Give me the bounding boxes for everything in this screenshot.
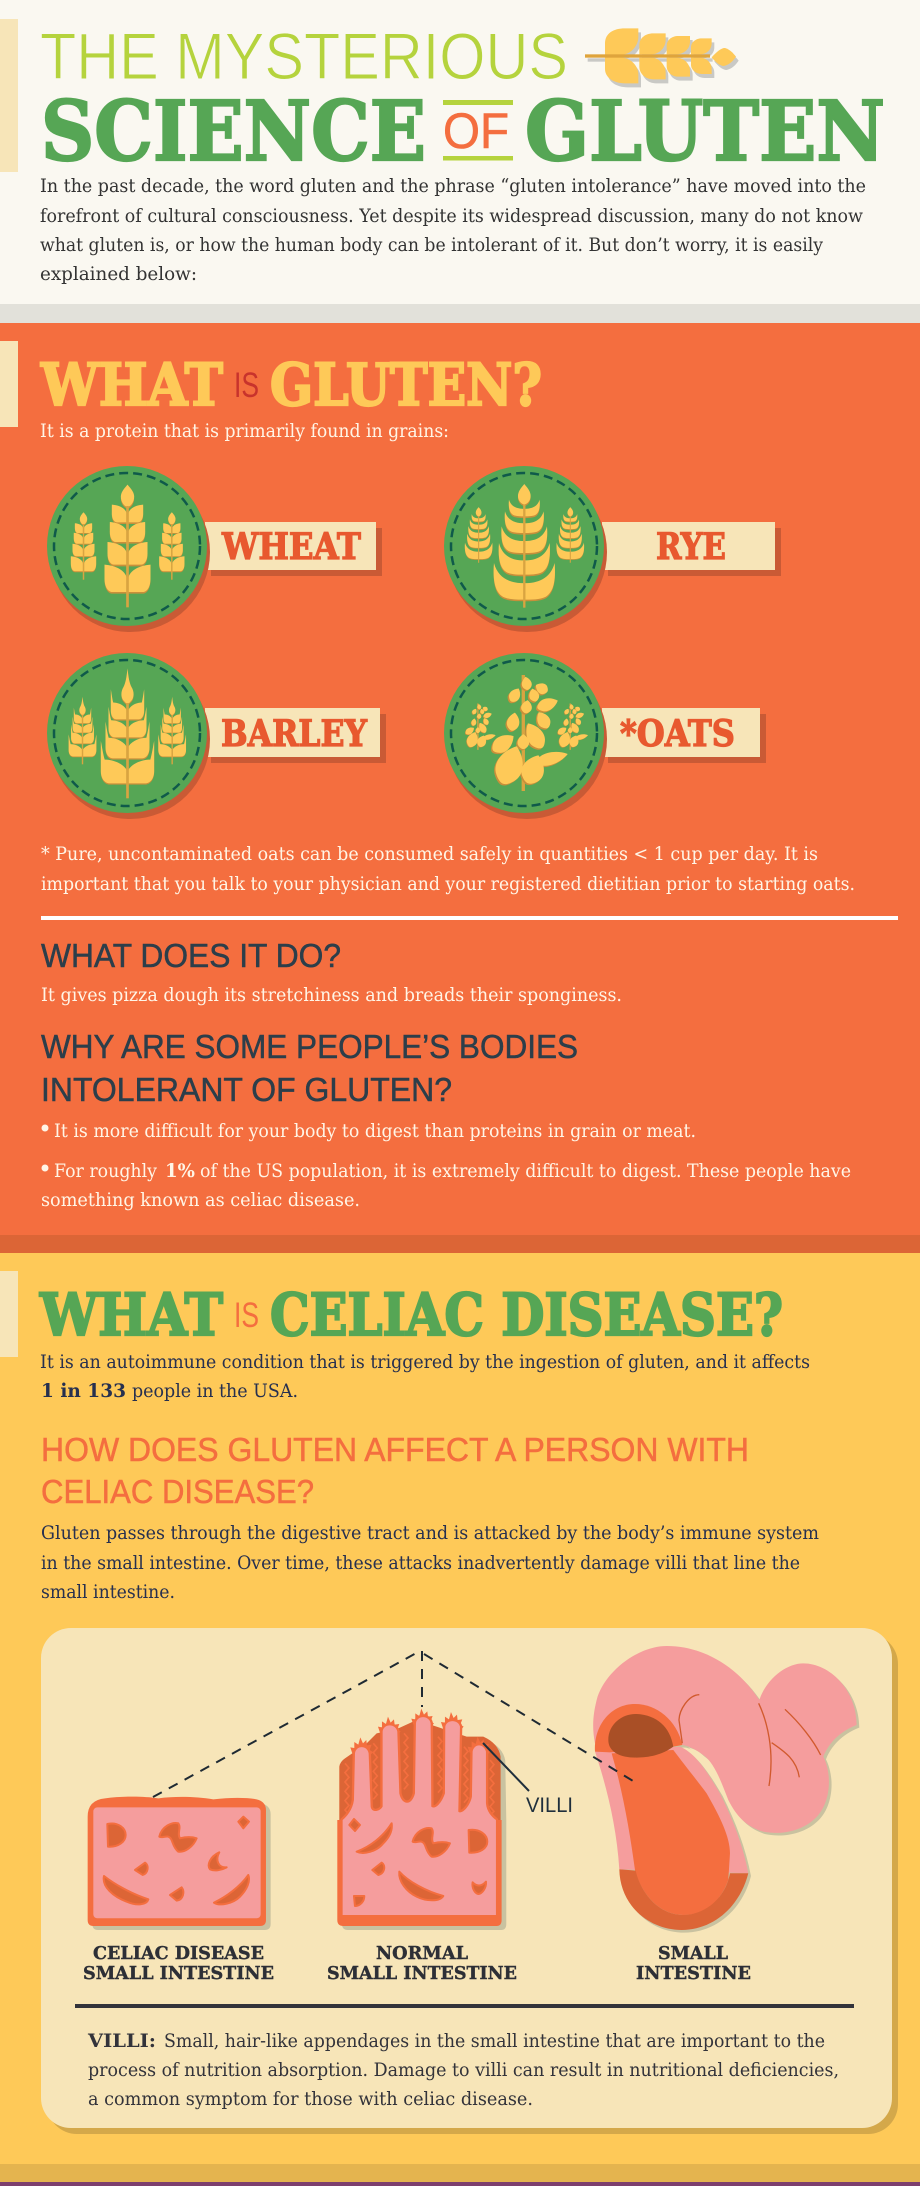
badge: wheat bbox=[47, 466, 382, 632]
gluten heading tab bbox=[0, 341, 18, 427]
caption: normal small intestine: NORMAL bbox=[376, 1943, 468, 1964]
badge: rye: RYE bbox=[656, 526, 726, 568]
gluten definition text: It is a protein that is primarily found in grains: bbox=[40, 420, 449, 442]
heading: why intolerant: WHY ARE SOME PEOPLE’S BODIES bbox=[41, 1028, 578, 1065]
band: gray divider bbox=[0, 304, 920, 323]
heading: how does gluten affect bbox=[41, 1431, 749, 1510]
heading: what is celiac disease: IS bbox=[234, 1296, 259, 1335]
celiac definition text: 1 in 133 bbox=[41, 1380, 126, 1402]
heading: why intolerant bbox=[41, 1028, 578, 1108]
heading: what does it do: WHAT DOES IT DO? bbox=[41, 937, 341, 974]
badge: barley: BARLEY bbox=[221, 713, 368, 755]
caption: celiac disease small intestine: SMALL INTESTINE bbox=[83, 1963, 274, 1984]
caption: celiac disease small intestine bbox=[83, 1943, 274, 1984]
section: what is celiac disease background bbox=[0, 1253, 920, 2164]
badge: rye bbox=[444, 466, 781, 632]
callout: villi: VILLI bbox=[526, 1794, 573, 1817]
bullet list: something known as celiac disease. bbox=[41, 1189, 360, 1211]
celiac definition text: people in the USA. bbox=[132, 1380, 298, 1402]
text: villi definition bbox=[87, 2030, 839, 2110]
illustration: normal small intestine bbox=[337, 1709, 506, 1930]
caption: normal small intestine bbox=[327, 1943, 517, 1984]
icon: wheat sprig bbox=[585, 28, 739, 87]
oats footnote: * Pure, uncontaminated oats can be consumed safely in quantities < 1 cup per day. It is bbox=[41, 843, 818, 865]
callout: villi bbox=[483, 1743, 573, 1817]
badge: barley bbox=[47, 653, 386, 819]
heading: what is gluten: WHAT bbox=[40, 351, 223, 419]
heading: what is gluten: GLUTEN? bbox=[270, 351, 542, 419]
illustration: small intestine bbox=[593, 1646, 859, 1933]
heading: why intolerant: INTOLERANT OF GLUTEN? bbox=[41, 1071, 452, 1108]
bullet list bbox=[41, 1120, 851, 1211]
oats footnote bbox=[41, 843, 855, 895]
caption: small intestine: SMALL bbox=[658, 1943, 728, 1964]
heading: what is gluten: IS bbox=[234, 366, 259, 405]
oats footnote: important that you talk to your physician and your registered dietitian prior to starting oats. bbox=[41, 873, 855, 895]
text: villi definition: VILLI: bbox=[87, 2030, 156, 2052]
badge: oats bbox=[444, 653, 766, 819]
text: what it does: It gives pizza dough its stretchiness and breads their sponginess. bbox=[41, 984, 622, 1006]
celiac definition text: It is an autoimmune condition that is triggered by the ingestion of gluten, and it affects bbox=[40, 1351, 810, 1373]
heading: what is celiac disease: WHAT bbox=[39, 1281, 223, 1349]
title: GLUTEN bbox=[525, 84, 885, 180]
text: how gluten affects: Gluten passes through the digestive tract and is attacked by the body’s immune system bbox=[41, 1522, 819, 1544]
heading: what is celiac disease bbox=[39, 1281, 783, 1349]
band: dark orange divider bbox=[0, 1235, 920, 1253]
intro text bbox=[40, 175, 866, 285]
title: OF bbox=[443, 103, 509, 159]
title bbox=[40, 19, 885, 180]
text: villi definition: a common symptom for those with celiac disease. bbox=[88, 2088, 533, 2110]
badge: wheat: WHEAT bbox=[221, 526, 361, 568]
section: what is gluten background bbox=[0, 323, 920, 1235]
celiac heading tab bbox=[0, 1271, 18, 1357]
bullet list: 1% bbox=[165, 1160, 195, 1182]
intro text: In the past decade, the word gluten and the phrase “gluten intolerance” have moved into the bbox=[40, 175, 866, 197]
bullet list: It is more difficult for your body to digest than proteins in grain or meat. bbox=[54, 1120, 696, 1142]
heading: how does gluten affect: HOW DOES GLUTEN AFFECT A PERSON WITH bbox=[41, 1431, 749, 1468]
band: purple footer edge bbox=[0, 2182, 920, 2186]
caption: small intestine bbox=[636, 1943, 751, 1984]
caption: small intestine: INTESTINE bbox=[636, 1963, 751, 1984]
caption: normal small intestine: SMALL INTESTINE bbox=[327, 1963, 517, 1984]
title: THE MYSTERIOUS bbox=[40, 19, 568, 93]
text: villi definition: process of nutrition absorption. Damage to villi can result in nutritional deficiencies, bbox=[88, 2059, 839, 2081]
intro text: what gluten is, or how the human body can be intolerant of it. But don’t worry, it is easily bbox=[40, 234, 823, 256]
heading: what is gluten bbox=[40, 351, 542, 419]
text: villi definition: Small, hair-like appendages in the small intestine that are important to the bbox=[164, 2030, 825, 2052]
band: dark yellow divider bbox=[0, 2164, 920, 2182]
panel: intestine diagram bbox=[41, 1628, 898, 2134]
bullet list: of the US population, it is extremely difficult to digest. These people have bbox=[200, 1160, 851, 1182]
illustration: celiac small intestine bbox=[88, 1797, 271, 1930]
text: how gluten affects: small intestine. bbox=[41, 1581, 175, 1603]
bullet list: For roughly bbox=[54, 1160, 157, 1182]
title: SCIENCE bbox=[41, 84, 426, 180]
heading: what is celiac disease: CELIAC DISEASE? bbox=[270, 1281, 783, 1349]
text: how gluten affects bbox=[41, 1522, 819, 1603]
dashed callout lines bbox=[153, 1651, 638, 1797]
caption: celiac disease small intestine: CELIAC DISEASE bbox=[93, 1943, 264, 1964]
text: how gluten affects: in the small intestine. Over time, these attacks inadvertently damage villi that line the bbox=[41, 1552, 800, 1574]
section: intro background bbox=[0, 0, 920, 304]
celiac definition text bbox=[40, 1351, 810, 1402]
badge: oats: *OATS bbox=[620, 713, 735, 755]
heading: how does gluten affect: CELIAC DISEASE? bbox=[41, 1473, 314, 1510]
intro text: forefront of cultural consciousness. Yet despite its widespread discussion, many do not know bbox=[40, 205, 864, 227]
intro text: explained below: bbox=[40, 263, 197, 285]
title tab bbox=[0, 19, 18, 172]
